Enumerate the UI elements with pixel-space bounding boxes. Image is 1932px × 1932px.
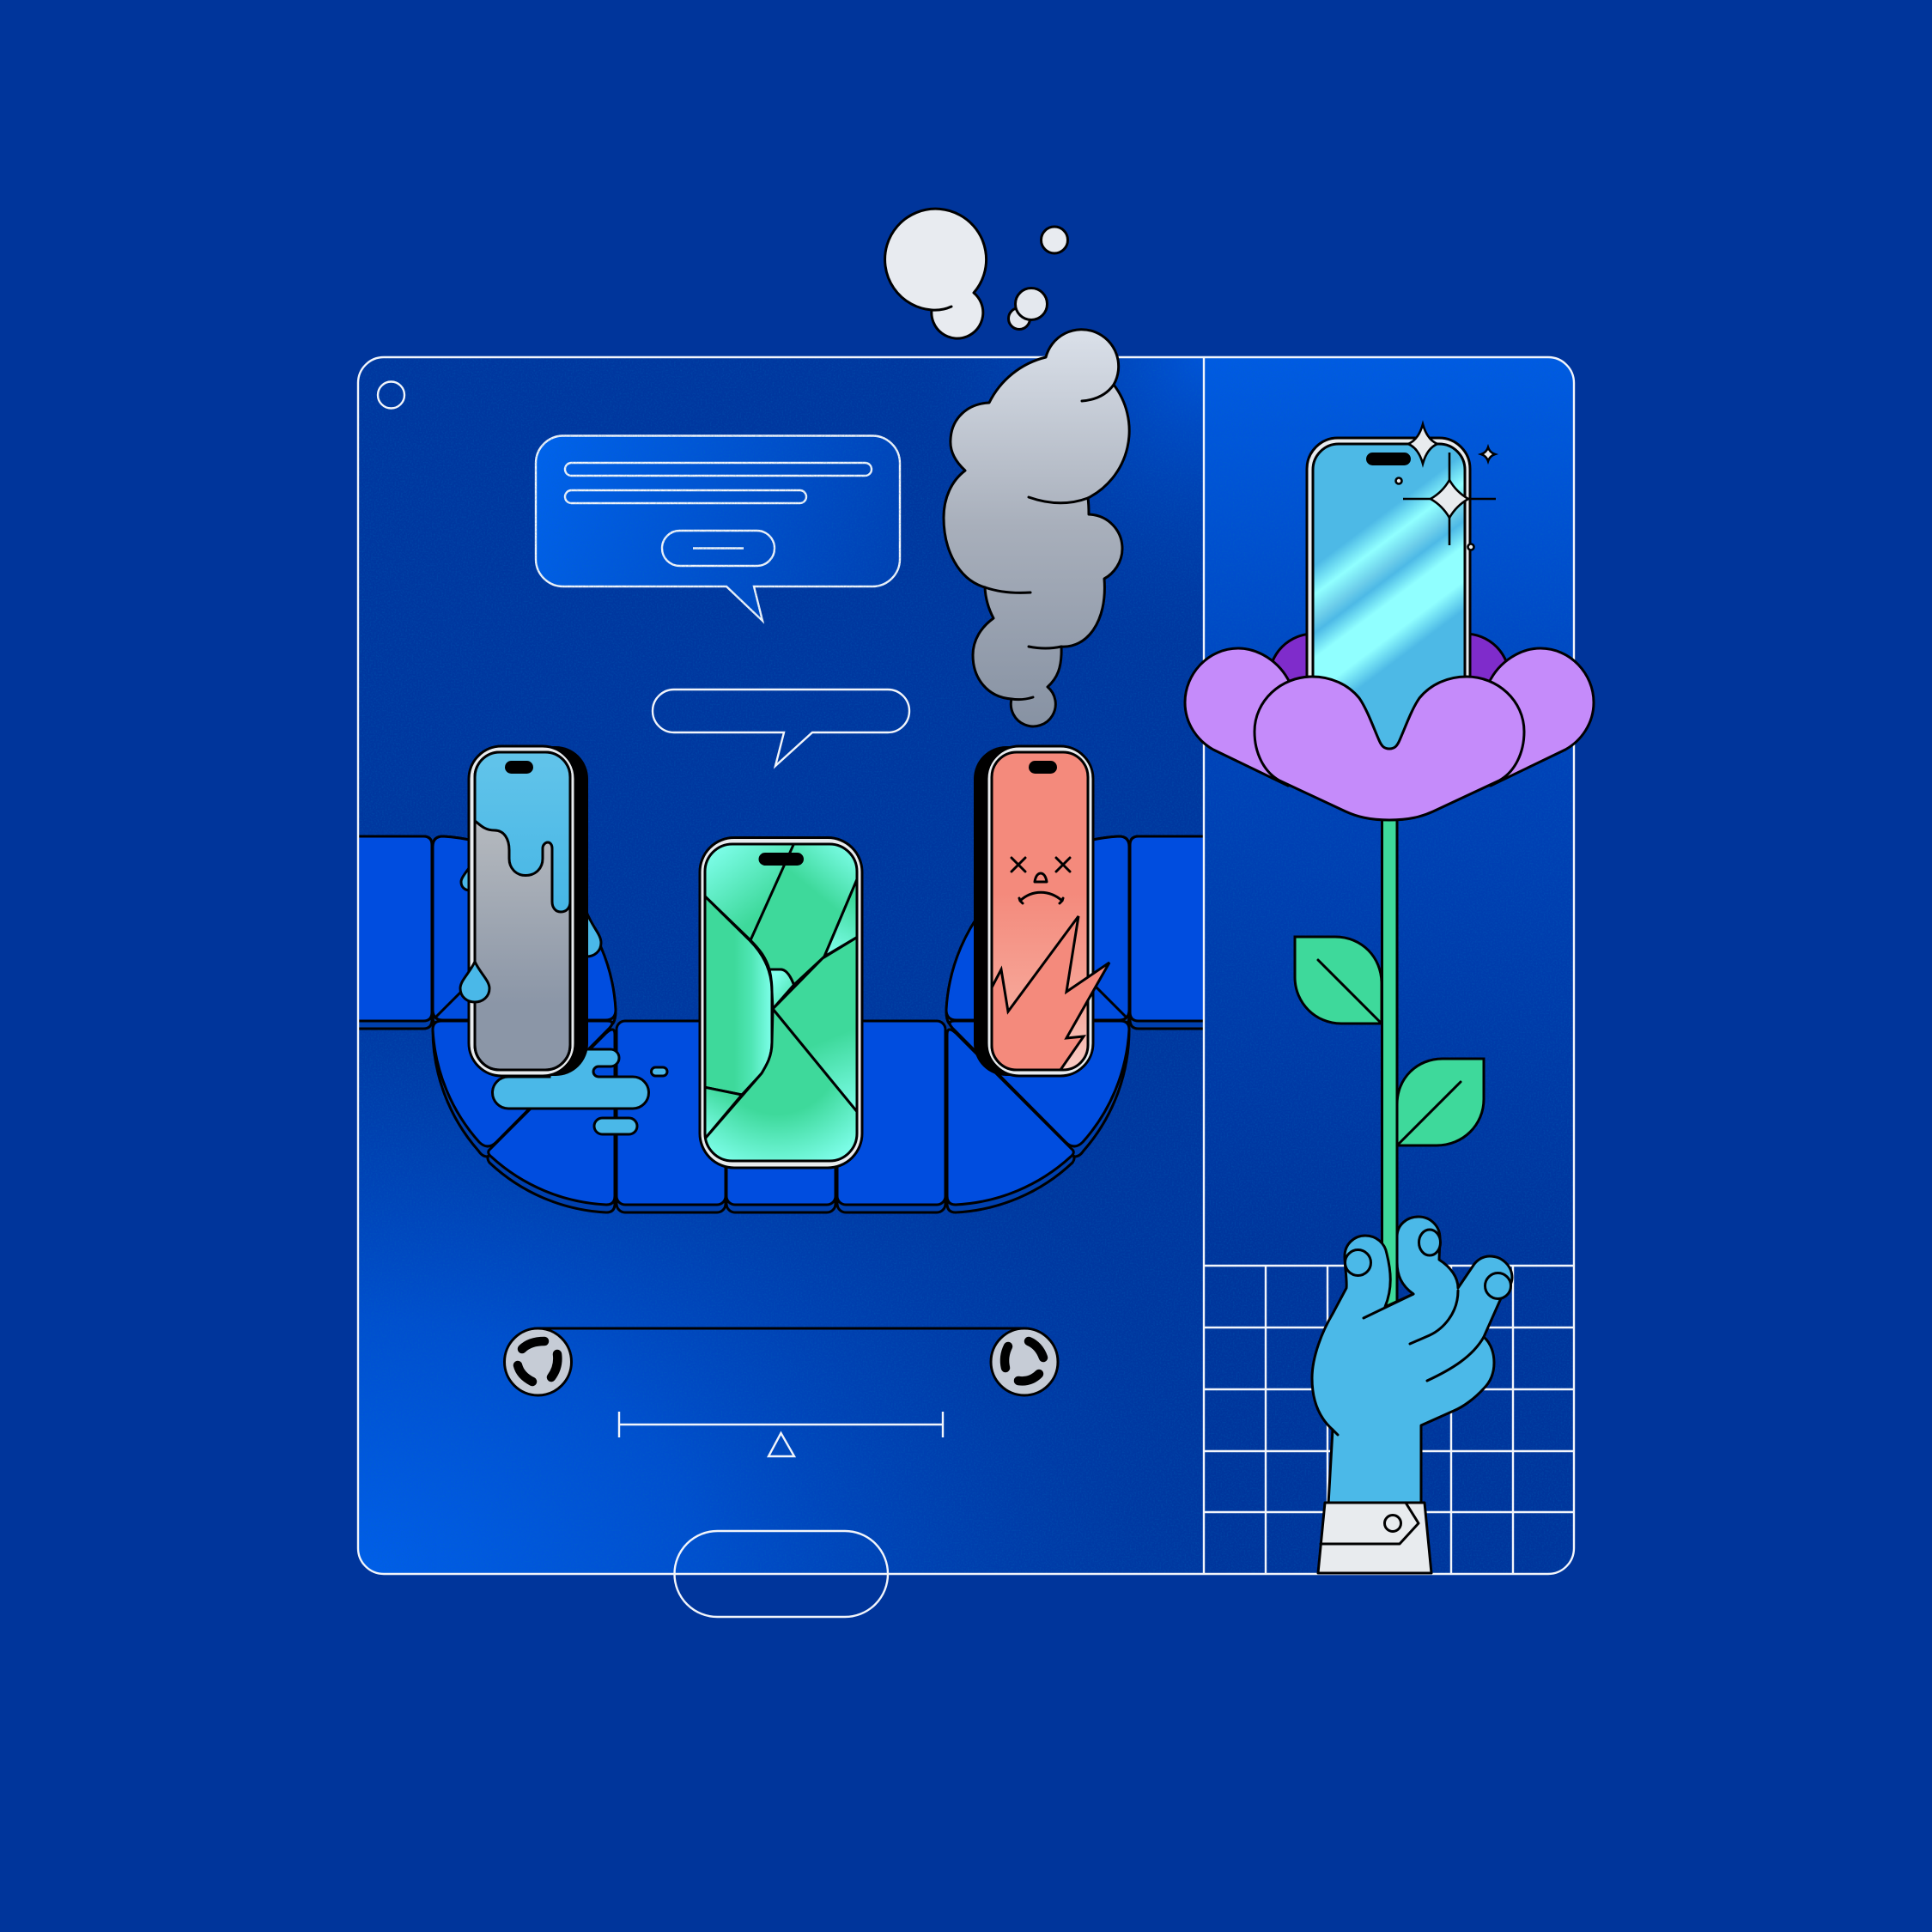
outer petals [1185, 648, 1594, 786]
cracked screen shards [706, 845, 855, 1159]
flower stem [1382, 816, 1397, 1322]
water dripping on screen [476, 754, 568, 914]
window outline [358, 357, 1574, 1574]
window button circle [378, 381, 404, 409]
wheel right [991, 1328, 1058, 1395]
scale bar [619, 1412, 943, 1456]
sparkles [1396, 424, 1496, 550]
phone: overheated red [974, 746, 1109, 1076]
front petals [1255, 677, 1524, 820]
leaf left [1295, 937, 1382, 1024]
phone notch [759, 853, 804, 866]
conveyor belt [352, 836, 1210, 1212]
phone: pristine [1307, 438, 1470, 764]
flower with phone [1185, 438, 1594, 820]
hand holding stem [1312, 1217, 1512, 1504]
shirt cuff [1318, 1503, 1431, 1573]
home pill button [675, 1531, 888, 1617]
panel: left window [358, 357, 1204, 1574]
finger creases [1333, 1291, 1484, 1435]
smoke puffs [885, 209, 1068, 338]
conveyor: right half [946, 836, 1210, 1212]
phone notch [505, 761, 533, 774]
back petals [1269, 634, 1510, 723]
smoke cloud [944, 330, 1129, 726]
phone: shattered green [700, 837, 862, 1168]
chat bubble: small [653, 690, 909, 766]
fingernails [1345, 1230, 1511, 1298]
phone notch [1029, 761, 1057, 774]
film grain texture [358, 357, 1574, 1574]
phone: water damaged [460, 746, 588, 1076]
phone notch [1366, 453, 1411, 465]
wheel left [505, 1328, 572, 1395]
panel: right window [1204, 357, 1574, 1574]
water drops behind phone [461, 866, 601, 957]
leaf right [1397, 1059, 1484, 1145]
conveyor wheels and belt [505, 1328, 1058, 1395]
water puddle [493, 1049, 667, 1134]
conveyor: left half [352, 836, 616, 1212]
grid in right panel [1205, 1266, 1574, 1574]
chat bubble: large [536, 436, 900, 621]
water drop [460, 962, 489, 1002]
flame crack [992, 916, 1109, 1070]
sad face [1012, 858, 1070, 903]
conveyor: centre segments [617, 1021, 945, 1212]
